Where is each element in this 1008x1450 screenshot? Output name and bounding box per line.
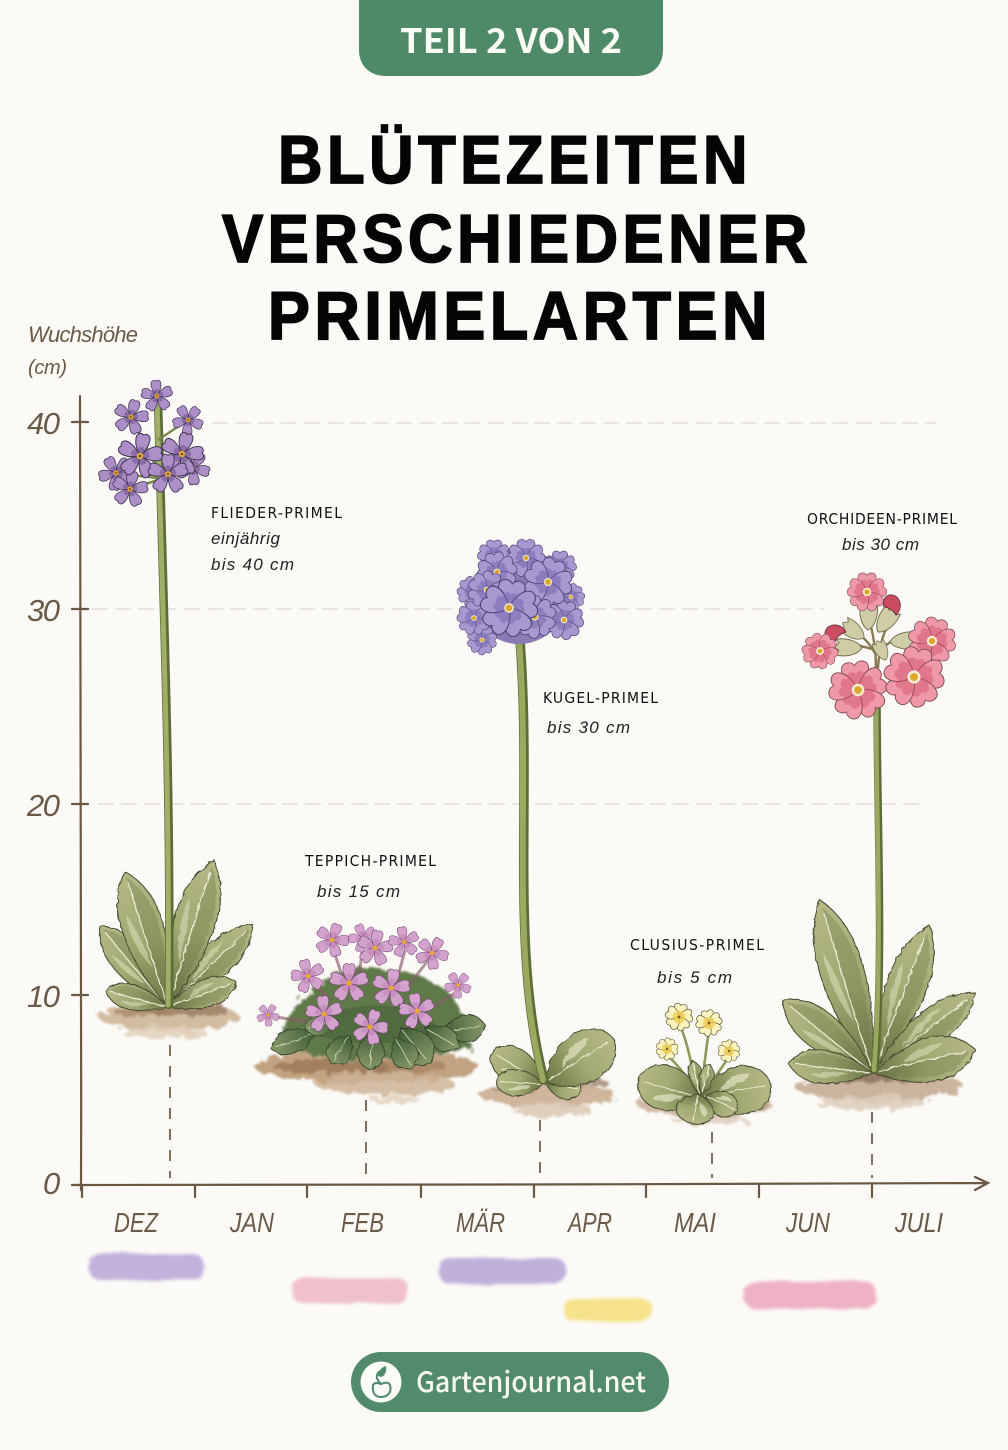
bar: Teppich-Primel, Februar: [292, 1278, 408, 1303]
stems: [668, 1025, 728, 1095]
plant: Orchideen-Primel: [771, 573, 986, 1110]
plant: Kugel-Primel: [449, 539, 627, 1117]
foliage mound: [267, 945, 487, 1074]
plant: Flieder-Primel: [87, 379, 264, 1039]
title: PRIMELARTEN: [268, 278, 772, 354]
label: Clusius-Primel: [630, 936, 764, 987]
bar: Orchideen-Primel, Juni: [744, 1281, 876, 1309]
label: Flieder-Primel: einjährig: [211, 529, 281, 548]
label: Orchideen-Primel: bis 30 cm: [842, 535, 919, 554]
soil: [638, 1094, 774, 1125]
label: Flieder-Primel: bis 40 cm: [211, 555, 294, 574]
flowers: [652, 1001, 744, 1065]
label: Kugel-Primel: [543, 689, 658, 737]
month labels: APR: [566, 1207, 612, 1238]
leaves: [632, 1059, 775, 1127]
month labels: [114, 1207, 943, 1238]
y axis title: [28, 322, 138, 379]
label: Clusius-Primel: bis 5 cm: [657, 968, 732, 987]
footer badge: Gartenjournal.net: [351, 1352, 669, 1412]
bloom period bars: [89, 1254, 876, 1321]
y axis: [80, 396, 81, 1190]
soil: [480, 1073, 616, 1117]
flower cluster: [795, 573, 963, 725]
bar: Kugel-Primel, März: [439, 1258, 566, 1284]
month labels: MAI: [674, 1207, 716, 1238]
title: [222, 122, 812, 354]
month labels: FEB: [341, 1207, 384, 1238]
stem: [158, 400, 169, 1005]
soil: [254, 1049, 478, 1104]
x ticks: [82, 1185, 872, 1197]
plant: Teppich-Primel: [252, 918, 487, 1104]
flower umbel: [92, 379, 217, 510]
label: Clusius-Primel: CLUSIUS-PRIMEL: [630, 936, 764, 954]
leaves: [771, 894, 986, 1094]
title: VERSCHIEDENER: [222, 201, 812, 277]
y axis title: (cm): [28, 357, 67, 379]
label: Flieder-Primel: [211, 504, 342, 574]
month labels: MÄR: [456, 1207, 505, 1238]
label: Flieder-Primel: FLIEDER-PRIMEL: [211, 504, 342, 522]
chart axes: [72, 396, 988, 1197]
bar: Flieder-Primel, Dezember: [89, 1254, 204, 1280]
flower head: [449, 539, 590, 660]
icon: logo: [360, 1362, 402, 1402]
y ticks: [72, 422, 88, 1185]
label: Teppich-Primel: TEPPICH-PRIMEL: [304, 852, 436, 870]
badge: Teil 2 von 2: [359, 0, 663, 76]
leaves: [87, 854, 264, 1020]
drop lines from plants to axis: [170, 1045, 872, 1178]
month labels: JUN: [785, 1207, 831, 1238]
grid lines: [92, 423, 936, 804]
y axis numbers: 30: [27, 593, 60, 628]
footer badge: Gartenjournal.net: Gartenjournal.net: [416, 1361, 646, 1401]
plant: Clusius-Primel: [632, 1001, 775, 1127]
label: Kugel-Primel: KUGEL-PRIMEL: [543, 689, 658, 707]
y axis title: Wuchshöhe: [28, 322, 138, 347]
y axis numbers: 40: [27, 406, 60, 441]
x axis with arrow: [76, 1177, 988, 1190]
label: Kugel-Primel: bis 30 cm: [547, 718, 630, 737]
y axis numbers: [26, 406, 60, 1201]
bar: Clusius-Primel, April: [564, 1299, 652, 1321]
label: Teppich-Primel: bis 15 cm: [317, 882, 400, 901]
stem: [875, 690, 880, 1070]
label: Orchideen-Primel: [807, 510, 957, 554]
month labels: DEZ: [114, 1207, 159, 1238]
stem: [520, 640, 544, 1080]
month labels: JULI: [894, 1207, 943, 1238]
soil: [98, 1002, 238, 1039]
label: Orchideen-Primel: ORCHIDEEN-PRIMEL: [807, 510, 957, 528]
month labels: JAN: [229, 1207, 275, 1238]
title: BLÜTEZEITEN: [278, 122, 752, 198]
y axis numbers: 0: [43, 1166, 60, 1201]
leaves: [483, 1018, 627, 1103]
y axis numbers: 20: [26, 788, 60, 823]
flower pedicels: [112, 417, 195, 489]
badge: Teil 2 von 2: TEIL 2 VON 2: [400, 14, 622, 63]
label: Teppich-Primel: [304, 852, 436, 901]
soil: [795, 1069, 965, 1110]
y axis numbers: 10: [27, 979, 60, 1014]
flowers: [252, 918, 477, 1050]
